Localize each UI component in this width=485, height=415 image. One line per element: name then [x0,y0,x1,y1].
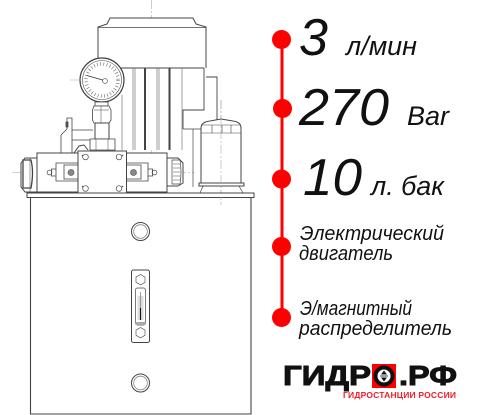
value: 3 [299,9,328,67]
feature: solenoid valve [272,298,452,340]
spec: flow rate [272,9,417,67]
value: 270 [298,79,389,137]
marker dot [272,308,291,327]
red connector line [280,39,284,317]
unit: л. бак [369,171,445,201]
oil tank [27,193,254,414]
spec: pressure [273,79,450,137]
hydraulic valve block [37,151,167,194]
label: распределитель [298,318,452,340]
label: двигатель [299,243,393,265]
value: 10 [303,149,362,207]
technical drawing of hydraulic unit [12,0,254,414]
bracket behind valve [61,118,93,153]
label: Э/магнитный [300,298,412,320]
drain port [132,374,150,392]
filler port [132,222,150,240]
feature: electric motor [272,223,444,265]
spec: tank volume [272,149,445,207]
right solenoid coil [167,158,183,186]
electric motor [98,18,217,187]
marker dot [272,30,291,49]
unit: л/мин [344,31,417,61]
marker dot [273,99,292,118]
logo wordmark right: .РФ [399,360,457,391]
logo wordmark left: ГИДР [283,360,371,391]
logo tagline: ГИДРОСТАНЦИИ РОССИИ [343,390,456,400]
label: Электрический [300,223,444,245]
marker dot [272,170,291,188]
centre lines [12,0,221,205]
oil filter [199,100,244,205]
pressure gauge [80,58,124,150]
logo [283,360,457,400]
marker dot [272,237,291,256]
unit: Bar [407,101,450,131]
oil level gauge [132,270,150,342]
logo icon [372,364,396,388]
left solenoid coil [21,158,37,192]
